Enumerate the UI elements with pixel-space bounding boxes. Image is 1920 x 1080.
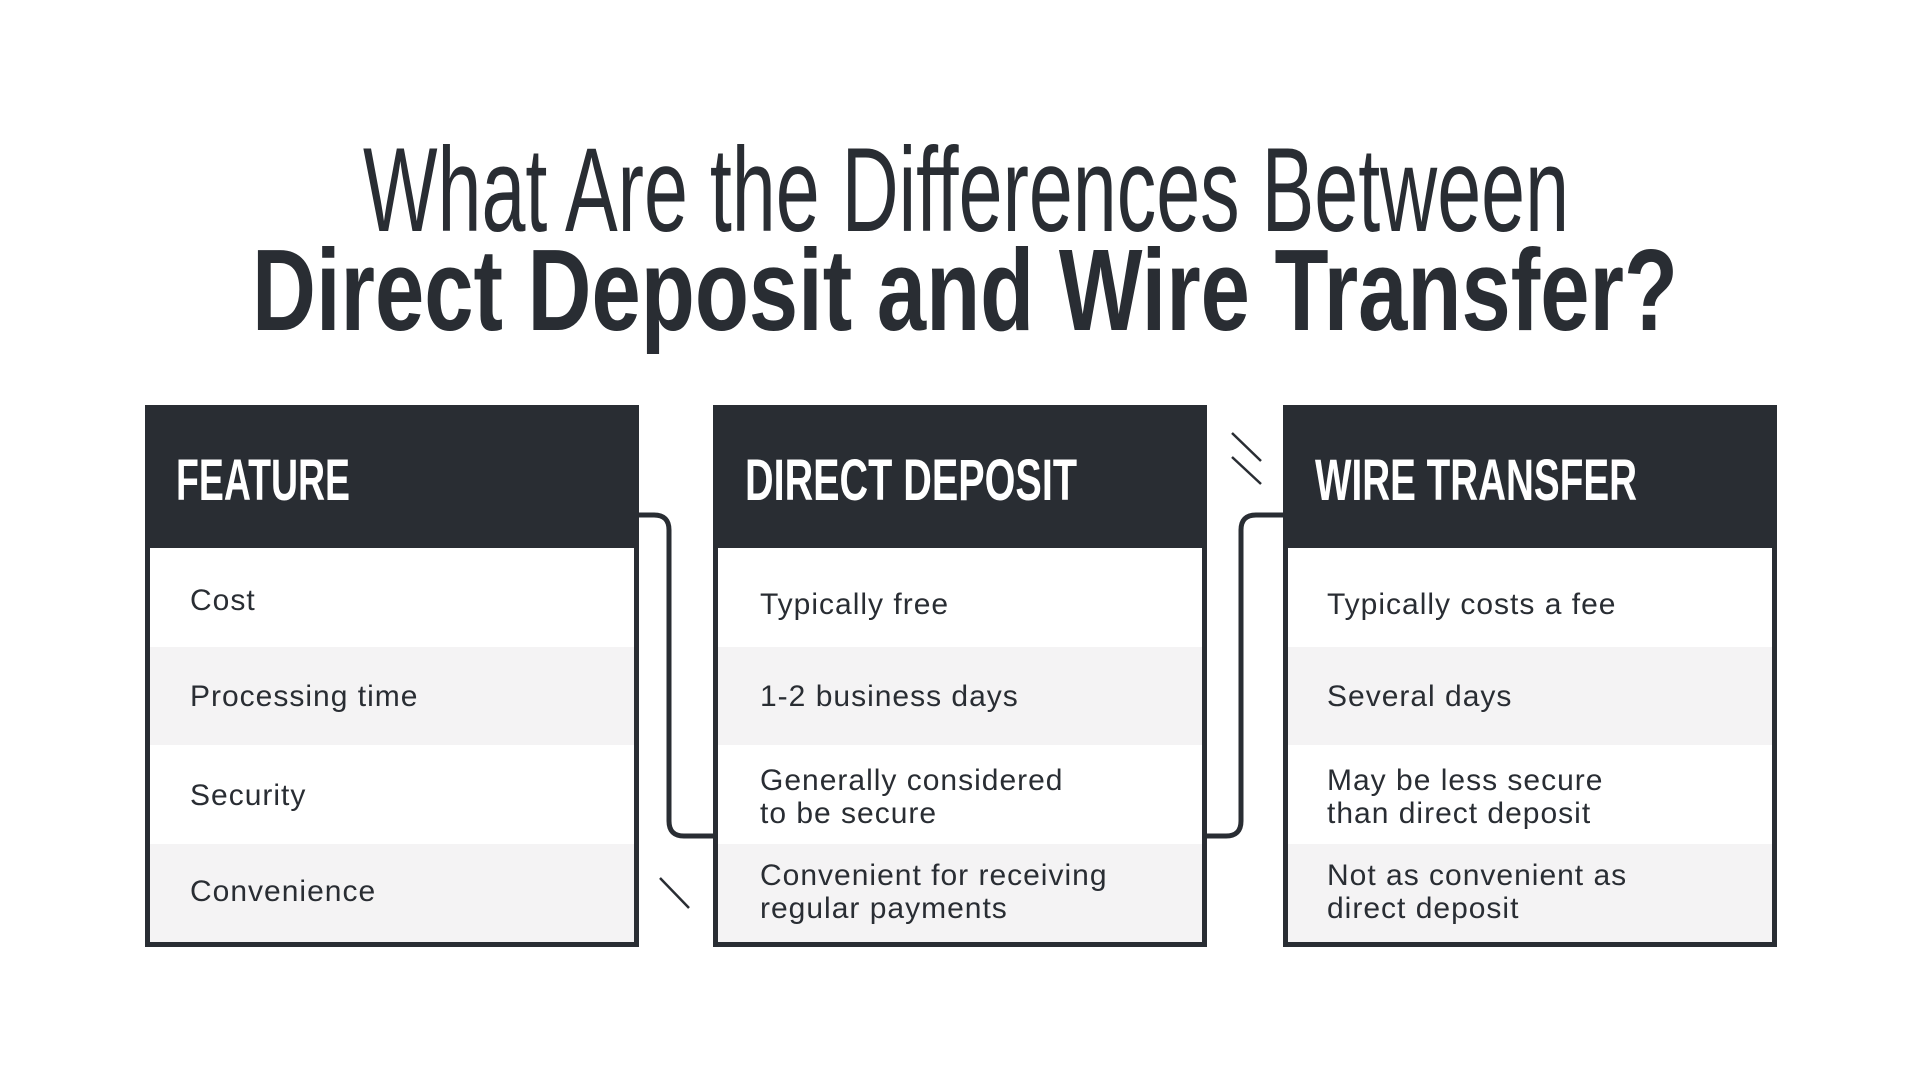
rows: wire transfer [1327,588,1627,925]
rows: wire transfer: May be less secure [1327,764,1603,797]
header: feature: FEATURE [176,448,350,513]
panel: direct deposit [713,405,1207,944]
rows: direct deposit: to be secure [760,797,937,830]
connector: direct deposit to wire transfer [1207,515,1283,836]
connector: feature to direct deposit [639,515,713,836]
rows: wire transfer: than direct deposit [1327,797,1591,830]
rows: feature: Processing time [190,680,418,713]
decoration: slash [660,878,689,908]
title [252,123,1678,355]
rows: direct deposit: Convenient for receiving [760,859,1108,892]
rows: wire transfer: Typically costs a fee [1327,588,1616,621]
rows: wire transfer: Not as convenient as [1327,859,1627,892]
rows: direct deposit: regular payments [760,892,1008,925]
panel: wire transfer [1283,405,1777,944]
rows: wire transfer: Several days [1327,680,1512,713]
decoration: double slash [1232,433,1261,484]
rows: direct deposit: 1-2 business days [760,680,1019,713]
rows: direct deposit: Generally considered [760,764,1064,797]
rows: feature: Security [190,779,306,812]
header: direct deposit: DIRECT DEPOSIT [745,448,1077,513]
rows: direct deposit [760,588,1108,925]
rows: feature [190,584,418,908]
rows: feature: Cost [190,584,256,617]
header: wire transfer: WIRE TRANSFER [1315,448,1637,513]
rows: direct deposit: Typically free [760,588,949,621]
panel: feature [145,405,639,944]
rows: wire transfer: direct deposit [1327,892,1519,925]
rows: feature: Convenience [190,875,376,908]
